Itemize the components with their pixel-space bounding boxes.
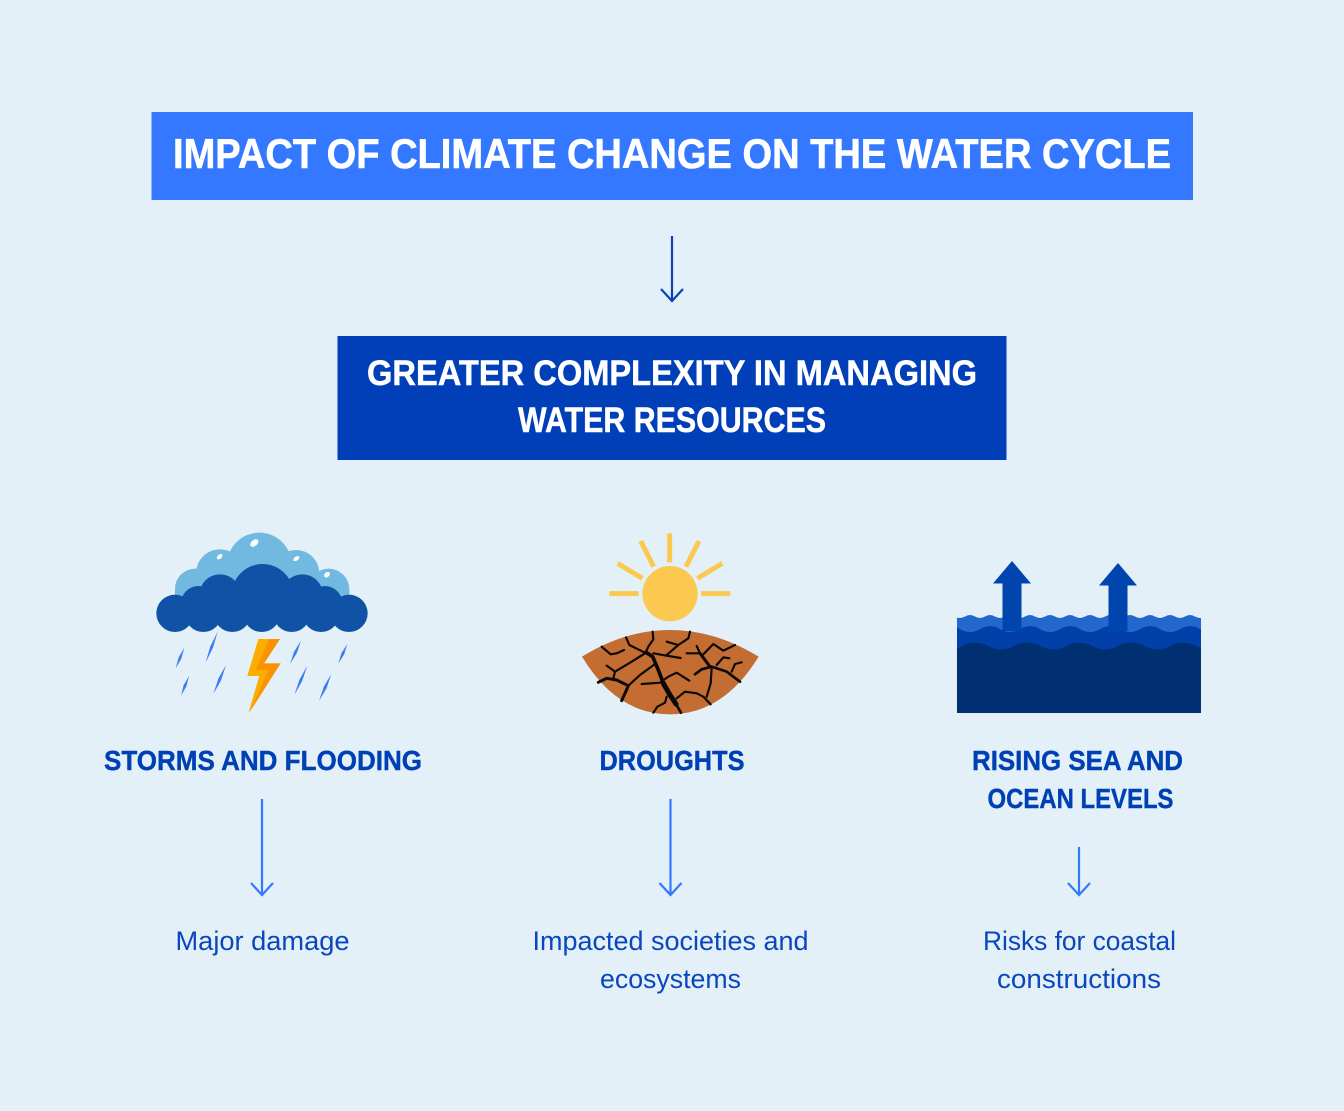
text: risks for coastal constructions: Risks for coastal: [983, 926, 1176, 956]
subtitle banner: WATER RESOURCES: [518, 401, 826, 440]
heading: rising sea and ocean levels: [972, 745, 1183, 814]
text: impacted societies and ecosystems: Impacted societies and: [532, 926, 808, 956]
heading: storms and flooding: STORMS AND FLOODING: [104, 745, 422, 776]
icon: sun over cracked earth: [582, 533, 759, 714]
arrow: storms to damage: [251, 799, 273, 895]
heading: rising sea and ocean levels: OCEAN LEVELS: [988, 783, 1174, 814]
sun: [609, 533, 730, 621]
text: impacted societies and ecosystems: ecosystems: [600, 964, 741, 994]
icon: rising sea levels: [957, 561, 1201, 713]
text: major damage: Major damage: [176, 926, 350, 956]
text: impacted societies and ecosystems: [532, 926, 808, 994]
subtitle banner: GREATER COMPLEXITY IN MANAGING: [367, 354, 977, 393]
title banner: [152, 112, 1193, 200]
arrow: title to subtitle: [661, 236, 683, 301]
arrow: sea levels to constructions: [1068, 847, 1090, 895]
subtitle banner: [338, 336, 1006, 460]
cracked earth: [582, 630, 759, 714]
heading: rising sea and ocean levels: RISING SEA AND: [972, 745, 1183, 776]
text: risks for coastal constructions: constructions: [997, 964, 1161, 994]
icon: storm cloud: [156, 533, 368, 713]
arrow: droughts to societies: [660, 799, 682, 895]
infographic: [104, 112, 1201, 994]
heading: droughts: DROUGHTS: [600, 745, 744, 776]
text: risks for coastal constructions: [983, 926, 1176, 994]
arrows up: [993, 561, 1137, 631]
water layers: [957, 615, 1201, 632]
title banner: IMPACT OF CLIMATE CHANGE ON THE WATER CYCLE: [173, 130, 1171, 177]
